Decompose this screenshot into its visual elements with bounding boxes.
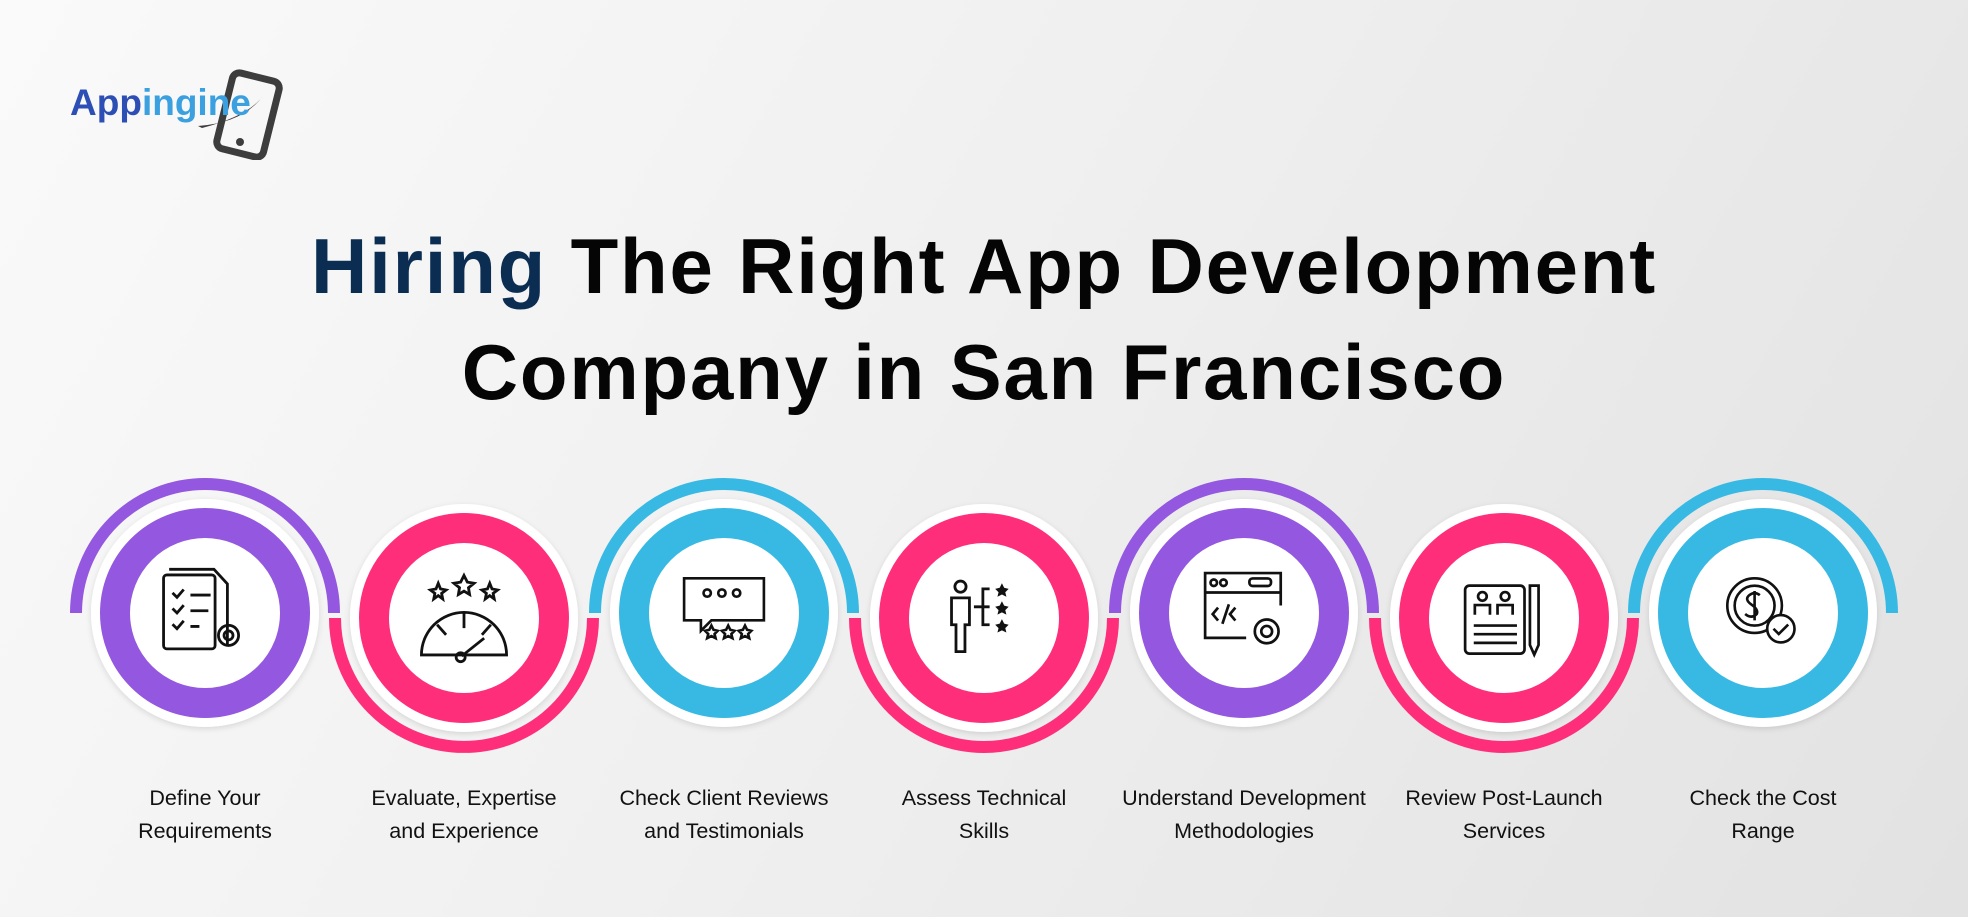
icon: review bubble bbox=[684, 578, 764, 638]
icon: code window gear bbox=[1205, 573, 1281, 643]
step 5 circle bbox=[1115, 484, 1373, 727]
icon: checklist bbox=[164, 569, 239, 649]
step 4 circle bbox=[855, 504, 1113, 747]
label 7: Range bbox=[1731, 819, 1795, 843]
logo bbox=[70, 69, 283, 160]
label 7 bbox=[1690, 786, 1836, 843]
process circles bbox=[70, 478, 1898, 753]
label 7: Check the Cost bbox=[1690, 786, 1836, 810]
label 1 bbox=[138, 786, 272, 843]
label 6: Review Post-Launch bbox=[1405, 786, 1603, 810]
step 6 circle bbox=[1375, 504, 1633, 747]
label 4 bbox=[902, 786, 1066, 843]
label 4: Skills bbox=[959, 819, 1009, 843]
label 2: and Experience bbox=[389, 819, 539, 843]
logo text: Appingine bbox=[70, 82, 251, 123]
label 2 bbox=[371, 786, 557, 843]
label 5: Understand Development bbox=[1122, 786, 1366, 810]
label 5: Methodologies bbox=[1174, 819, 1314, 843]
title: Company in San Francisco bbox=[462, 328, 1506, 416]
logo phone bbox=[198, 71, 281, 159]
step 7 circle bbox=[1634, 484, 1892, 727]
step 2 circle bbox=[335, 504, 593, 747]
label 6 bbox=[1405, 786, 1603, 843]
icon: coin check bbox=[1727, 578, 1794, 642]
label 1: Requirements bbox=[138, 819, 272, 843]
label 6: Services bbox=[1463, 819, 1545, 843]
label 3 bbox=[619, 786, 829, 843]
icon: profile doc pencil bbox=[1465, 586, 1539, 655]
label 4: Assess Technical bbox=[902, 786, 1066, 810]
title bbox=[311, 222, 1657, 416]
icon: person skills bbox=[952, 581, 1009, 652]
icon: gauge stars bbox=[421, 575, 507, 662]
title: Hiring The Right App Development bbox=[311, 222, 1657, 310]
label 1: Define Your bbox=[149, 786, 261, 810]
step 3 circle bbox=[595, 484, 853, 727]
label 3: and Testimonials bbox=[644, 819, 804, 843]
step 1 circle bbox=[76, 484, 334, 727]
label 3: Check Client Reviews bbox=[619, 786, 829, 810]
label 2: Evaluate, Expertise bbox=[371, 786, 557, 810]
label 5 bbox=[1122, 786, 1366, 843]
